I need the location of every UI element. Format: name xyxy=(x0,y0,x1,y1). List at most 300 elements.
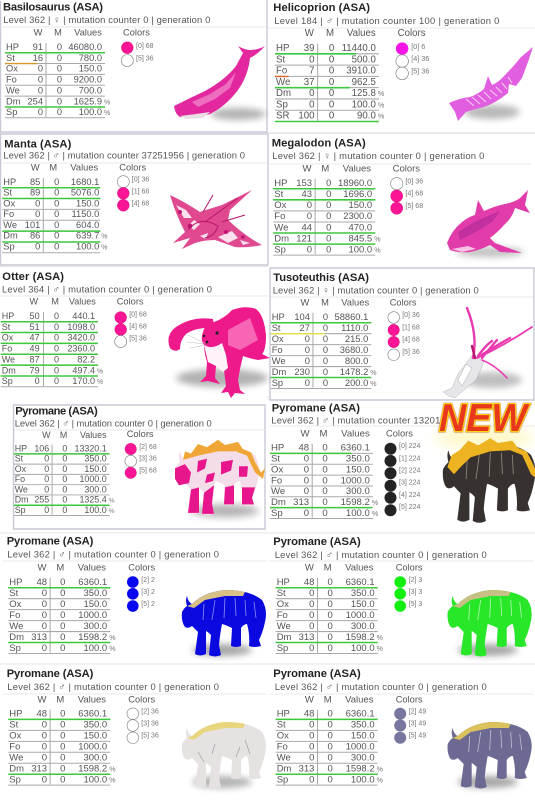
title: Pyromane blue: Pyromane (ASA) xyxy=(7,536,94,548)
stat table: Helicoprion: 100 xyxy=(298,111,314,122)
stat table: Pyromane purple: % xyxy=(377,776,384,784)
stat table: Otter: Values xyxy=(69,297,96,307)
stat table: Megalodon: Values xyxy=(343,163,371,174)
stat table: Pyromane purple: 0 xyxy=(309,774,314,785)
stat table: Pyromane blue: HP xyxy=(9,577,22,588)
color swatches: Tusoteuthis: [0] 36 xyxy=(402,312,420,319)
stat table: Pyromane green: Dm xyxy=(277,632,292,643)
stat table: Pyromane black: St xyxy=(271,454,280,465)
color swatches: Pyromane purple: [5] 49 xyxy=(409,733,426,740)
stat table: Pyromane purple: 100.0 xyxy=(351,774,375,785)
stat table: Pyromane white: 150.0 xyxy=(83,731,107,742)
stat table: Otter: 0 xyxy=(54,333,59,343)
stat table: Pyromane pink: Fo xyxy=(15,474,25,484)
stat table: Pyromane purple: Sp xyxy=(277,774,288,785)
stat table: Megalodon: 0 xyxy=(326,233,331,244)
stat table: Otter: Fo xyxy=(2,343,12,354)
stat table: Pyromane green: 0 xyxy=(309,610,314,621)
color swatches: Helicoprion: [4] 36 xyxy=(411,54,429,63)
stat table: Otter: 0 xyxy=(35,376,40,386)
stat table: Pyromane pink: 0 xyxy=(62,464,67,474)
stat table: Pyromane white: 0 xyxy=(42,731,47,742)
stat table: Basilosaurus: W xyxy=(34,28,43,38)
stat table: Helicoprion: Sp xyxy=(276,99,288,110)
color swatches: Pyromane pink: Colors xyxy=(127,429,154,439)
stat table: Helicoprion: 0 xyxy=(329,54,334,65)
stat table: Pyromane white: 0 xyxy=(60,731,65,742)
stat table: Basilosaurus: Ox xyxy=(6,64,18,74)
stat table: Pyromane black: Dm xyxy=(271,497,286,508)
stat table: Pyromane black: % xyxy=(372,499,379,507)
color swatches: Pyromane white: [2] 36 xyxy=(141,709,159,716)
color swatches: Pyromane white: [5] 36 xyxy=(141,733,159,740)
stat table: Pyromane black: 0 xyxy=(304,475,309,486)
stat table: Pyromane blue: 313 xyxy=(31,632,47,643)
stat table: Pyromane white: W xyxy=(37,694,47,705)
stat table: Tusoteuthis: W xyxy=(300,298,309,308)
color swatches: Tusoteuthis: Colors xyxy=(390,298,417,308)
stat table: Pyromane purple: 0 xyxy=(328,774,333,785)
stat table: Pyromane white: 350.0 xyxy=(83,720,107,731)
stat table: Megalodon: 0 xyxy=(326,244,331,255)
stat table: Otter: 0 xyxy=(54,376,59,386)
card: Pyromane pink xyxy=(14,406,265,517)
stat table: Pyromane purple: 0 xyxy=(328,753,333,764)
color swatches: Pyromane blue: Colors xyxy=(128,563,156,573)
stat table: Megalodon: Sp xyxy=(274,244,286,255)
stat table: Otter: Sp xyxy=(2,376,13,386)
stat table: Tusoteuthis: 104 xyxy=(294,312,310,322)
stat table: Pyromane pink: 0 xyxy=(62,454,67,464)
glow behind NEW xyxy=(435,428,535,448)
stat table: Helicoprion: St xyxy=(276,54,285,65)
stat table: Otter: 440.1 xyxy=(72,311,95,321)
stat table: Pyromane black: 0 xyxy=(304,454,309,465)
stat table: Basilosaurus: 0 xyxy=(38,64,43,74)
stat table: Tusoteuthis: 800.0 xyxy=(345,356,368,366)
stat table: Megalodon: 0 xyxy=(326,189,331,200)
stat table: Otter: % xyxy=(97,368,103,375)
color swatches: Pyromane black: [5] 224 xyxy=(399,504,421,511)
stat table: Otter: 170.0 xyxy=(72,376,95,386)
stat table: Pyromane purple: St xyxy=(277,720,286,731)
stat table: Pyromane black: 1000.0 xyxy=(341,475,370,486)
stat table: Helicoprion: 7 xyxy=(309,66,314,77)
stat table: Pyromane black: 100.0 xyxy=(346,508,370,519)
subtitle: Basilosaurus: Level 362 | ♀ | mutation counter 0 | generation 0 xyxy=(3,14,210,25)
stat table: Otter: 49 xyxy=(30,343,40,354)
stat table: Pyromane pink: Dm xyxy=(15,495,29,505)
stat table: Tusoteuthis: 0 xyxy=(305,345,310,355)
stat table: Manta: 86 xyxy=(30,231,40,241)
stat table: Tusoteuthis: Fo xyxy=(272,345,283,355)
color swatches: Otter: [4] 68 xyxy=(129,324,147,330)
creature: Tusoteuthis squid xyxy=(443,308,532,398)
color swatches: Manta: Colors xyxy=(119,163,147,173)
stat table: Pyromane purple: 1598.2 xyxy=(346,764,375,774)
badge: NEW: NEW xyxy=(439,397,530,440)
stat table: Basilosaurus: HP xyxy=(6,42,19,52)
stat table: Tusoteuthis: We xyxy=(272,356,286,366)
stat table: Megalodon: 1696.0 xyxy=(343,189,372,200)
color swatches: Otter: Colors xyxy=(117,297,144,307)
card: Pyromane purple xyxy=(273,668,532,788)
stat table: Manta xyxy=(2,163,108,253)
stat table: Pyromane black: HP xyxy=(271,443,284,454)
stat table: Manta: 604.0 xyxy=(76,220,99,230)
stat table: Otter: 2360.0 xyxy=(67,343,95,354)
stat table: Megalodon: 2300.0 xyxy=(343,211,372,222)
subtitle: Tusoteuthis: Level 362 | ♀ | mutation counter 0 | generation 0 xyxy=(273,284,479,295)
stat table: Pyromane purple: 0 xyxy=(328,731,333,742)
stat table: Basilosaurus: 16 xyxy=(33,53,43,63)
stat table: Helicoprion: 90.0 xyxy=(357,111,376,122)
color swatches: Megalodon: [0] 36 xyxy=(405,177,423,185)
stat table: Pyromane purple: 6360.1 xyxy=(346,709,375,720)
stat table: Pyromane white: Dm xyxy=(9,764,24,774)
stat table: Pyromane black: 6360.1 xyxy=(341,443,370,454)
color swatches: Helicoprion: Colors xyxy=(398,28,426,39)
stat table: Tusoteuthis: 0 xyxy=(305,334,310,344)
stat table: Pyromane white: % xyxy=(109,776,116,784)
stat table: Pyromane purple: Values xyxy=(345,694,374,705)
stat table: Pyromane white: 0 xyxy=(42,720,47,731)
stat table: Pyromane white xyxy=(8,694,116,785)
stat table: Pyromane black: 0 xyxy=(322,475,328,486)
stat table: Pyromane blue: 0 xyxy=(60,643,65,654)
stat table: Helicoprion: 0 xyxy=(309,99,314,110)
stat table: Pyromane purple: 0 xyxy=(309,731,314,742)
subtitle: Otter: Level 364 | ♂ | mutation counter 0 | generation 0 xyxy=(2,283,212,294)
stat table: Pyromane pink: 0 xyxy=(62,443,67,453)
stat table: Pyromane green: W xyxy=(305,563,314,574)
card: Pyromane green xyxy=(273,536,532,656)
stat table: Otter: 1098.0 xyxy=(67,322,95,332)
stat table: Helicoprion: W xyxy=(305,28,315,39)
stat table: Basilosaurus: % xyxy=(104,99,110,106)
stat table: Pyromane green: Values xyxy=(345,563,374,574)
stat table: Helicoprion: M xyxy=(326,28,334,39)
card: Pyromane black xyxy=(270,397,535,523)
stat table: Pyromane green: 0 xyxy=(309,588,314,599)
stat table: Manta: 150.0 xyxy=(76,198,99,208)
stat table: Otter: We xyxy=(2,354,15,364)
stat table: Pyromane black: % xyxy=(372,510,379,518)
stat table: Megalodon: 0 xyxy=(326,222,331,233)
stat table: Tusoteuthis: 230 xyxy=(294,367,310,377)
subtitle: Megalodon: Level 362 | ♀ | mutation counter 0 | generation 0 xyxy=(272,150,484,161)
color swatches: Pyromane black: [4] 224 xyxy=(399,492,421,499)
color swatches: Pyromane pink: [5] 68 xyxy=(139,467,157,474)
stat table: Manta: Values xyxy=(70,163,99,173)
stat table: Manta: 0 xyxy=(35,209,40,219)
color swatches: Pyromane blue xyxy=(127,563,156,612)
stat table: Megalodon: M xyxy=(321,163,329,174)
stat table: Pyromane pink: 0 xyxy=(44,484,49,494)
stat table: Otter: 0 xyxy=(54,354,59,364)
stat table: Megalodon: We xyxy=(274,222,288,233)
stat table: Pyromane blue: We xyxy=(9,621,23,632)
stat table: Tusoteuthis: % xyxy=(370,381,377,388)
stat table: Pyromane black: Values xyxy=(341,429,370,439)
title: Otter: Otter (ASA) xyxy=(2,271,64,283)
color swatches: Helicoprion xyxy=(396,28,429,80)
stat table: Basilosaurus: 0 xyxy=(57,75,62,85)
stat table: Pyromane blue: 0 xyxy=(42,621,47,632)
stat table: Otter: 497.4 xyxy=(72,365,95,375)
stat table: Pyromane black: 313 xyxy=(293,497,309,508)
stat table: Tusoteuthis: Ox xyxy=(272,334,284,344)
stat table: Megalodon: 0 xyxy=(326,200,331,211)
color swatches: Basilosaurus: Colors xyxy=(123,28,150,38)
stat table: Pyromane green: 300.0 xyxy=(351,621,375,632)
stat table: Megalodon: 845.5 xyxy=(349,233,372,244)
creature: Pyromane purple xyxy=(448,722,532,788)
stat table: Helicoprion: 0 xyxy=(309,88,314,99)
stat table: Manta: 0 xyxy=(54,241,59,251)
stat table: Manta: 0 xyxy=(54,231,59,241)
stat table: Pyromane green: Fo xyxy=(277,610,288,621)
stat table: Megalodon: 470.0 xyxy=(349,222,372,233)
stat table: Otter: Dm xyxy=(2,365,16,375)
color swatches: Pyromane purple: Colors xyxy=(396,694,423,704)
stat table: Manta: 100.0 xyxy=(76,241,99,251)
stat table: Otter: 0 xyxy=(54,311,59,321)
stat table: Helicoprion: Values xyxy=(347,28,376,39)
stat table: Helicoprion: 125.8 xyxy=(352,88,376,99)
stat table: Tusoteuthis: 0 xyxy=(323,323,328,333)
stat table: Pyromane pink: HP xyxy=(15,443,27,453)
stat table: Megalodon: Ox xyxy=(274,200,287,211)
stat table: Pyromane pink: 300.0 xyxy=(84,484,107,494)
stat table: Pyromane black: 0 xyxy=(322,454,328,465)
stat table: Manta: % xyxy=(101,234,108,241)
stat table: Manta: St xyxy=(3,188,13,198)
stat table: Manta: 0 xyxy=(35,241,40,251)
stat table: Tusoteuthis: Sp xyxy=(272,378,283,388)
stat table: Helicoprion: 3910.0 xyxy=(346,66,376,77)
stat table: Pyromane pink: 0 xyxy=(62,484,67,494)
stat table: Pyromane blue: 0 xyxy=(60,599,65,610)
stat table: Pyromane blue xyxy=(8,563,116,654)
creature: Pyromane black xyxy=(443,438,535,523)
stat table: Tusoteuthis: 215.0 xyxy=(345,334,368,344)
stat table: Pyromane purple: 350.0 xyxy=(351,720,375,731)
stat table: Manta: 1680.1 xyxy=(71,177,99,187)
stat table: Megalodon: 153 xyxy=(296,178,312,189)
creature: Manta ray xyxy=(170,190,262,249)
stat table: Pyromane white: 1598.2 xyxy=(78,764,107,774)
color swatches: Basilosaurus xyxy=(121,28,154,66)
title: Pyromane white: Pyromane (ASA) xyxy=(7,668,94,680)
stat table: Pyromane white: 0 xyxy=(60,742,65,753)
stat table: Basilosaurus: 0 xyxy=(38,75,43,85)
stat table: Manta: 101 xyxy=(25,220,40,230)
stat table: Manta: 0 xyxy=(54,209,59,219)
stat table: Tusoteuthis: 0 xyxy=(323,345,328,355)
stat table: Pyromane blue: 1000.0 xyxy=(78,610,107,621)
color swatches: Tusoteuthis xyxy=(388,298,420,360)
color swatches: Pyromane black: [3] 224 xyxy=(399,480,421,487)
stat table: Otter: 82.2 xyxy=(77,354,95,364)
stat table: Pyromane blue: M xyxy=(56,563,64,574)
stat table: Helicoprion: Fo xyxy=(276,66,287,77)
stat table: Basilosaurus: 0 xyxy=(57,85,62,95)
stat table: Manta: M xyxy=(49,163,57,173)
stat table: Helicoprion: 500.0 xyxy=(352,54,376,65)
stat table: Pyromane green: We xyxy=(277,621,291,632)
stat table: Manta: 0 xyxy=(54,188,59,198)
stat table: Pyromane pink: 1325.4 xyxy=(79,495,107,505)
stat table: Pyromane pink: M xyxy=(60,430,67,440)
stat table: Pyromane blue: Fo xyxy=(9,610,20,621)
stat table: Pyromane blue: 0 xyxy=(42,643,47,654)
stat table: Pyromane black: 0 xyxy=(304,508,309,519)
stat table: Helicoprion: % xyxy=(378,89,385,98)
stat table: Pyromane blue: 48 xyxy=(36,577,47,588)
stat table: Pyromane pink: 0 xyxy=(44,474,49,484)
stat table: Pyromane black: W xyxy=(300,429,310,439)
stat table: Helicoprion: 0 xyxy=(329,111,334,122)
color swatches: Basilosaurus: [0] 68 xyxy=(136,43,154,50)
stat table: Pyromane white: 300.0 xyxy=(83,753,107,764)
stat table: Megalodon: 100.0 xyxy=(349,244,372,255)
subtitle: Pyromane blue: Level 362 | ♂ | mutation counter 0 | generation 0 xyxy=(7,549,219,560)
stat table: Pyromane purple: 0 xyxy=(328,742,333,753)
color swatches: Megalodon: [4] 68 xyxy=(405,190,423,198)
stat table: Pyromane blue: Values xyxy=(78,563,106,574)
stat table: Pyromane blue: 0 xyxy=(60,632,65,643)
title: Tusoteuthis: Tusoteuthis (ASA) xyxy=(273,272,369,284)
stat table: Basilosaurus: 780.0 xyxy=(79,53,102,63)
stat table: Basilosaurus: 254 xyxy=(27,96,43,106)
stat table: Pyromane pink: 100.0 xyxy=(84,505,107,515)
stat table: Otter: St xyxy=(2,322,11,332)
stat table: Megalodon: 43 xyxy=(301,189,312,200)
stat table: Pyromane purple: W xyxy=(305,694,314,705)
stat table: Pyromane white: 0 xyxy=(42,742,47,753)
stat table: Tusoteuthis: 200.0 xyxy=(345,378,368,388)
stat table: Pyromane black: We xyxy=(271,486,285,497)
stat table: Pyromane purple: M xyxy=(324,694,332,705)
stat table: Basilosaurus: 700.0 xyxy=(79,85,102,95)
stat table: Helicoprion: % xyxy=(378,100,385,109)
stat table: Pyromane green: 0 xyxy=(328,610,333,621)
color swatches: Manta: [4] 68 xyxy=(132,200,149,208)
stat table: Megalodon: HP xyxy=(274,178,287,189)
stat table: Pyromane black: 350.0 xyxy=(346,454,370,465)
stat table: Pyromane black xyxy=(270,429,379,519)
stat table: Pyromane white: 313 xyxy=(31,764,47,774)
stat table: Pyromane pink: W xyxy=(42,430,51,440)
stat table: Pyromane black: 48 xyxy=(298,443,309,454)
stat table: Otter: 0 xyxy=(54,343,59,354)
stat table: Pyromane blue: 6360.1 xyxy=(78,577,107,588)
stat table: Pyromane purple: Dm xyxy=(277,764,292,774)
stat table: Pyromane black: 0 xyxy=(322,497,328,508)
subtitle: Manta: Level 362 | ♂ | mutation counter 37251956 | generation 0 xyxy=(3,150,245,161)
stat table: Otter: Ox xyxy=(2,333,14,343)
stat table: Tusoteuthis: 1478.2 xyxy=(340,367,368,377)
stat table: Manta: W xyxy=(31,163,40,173)
stat table: Otter: 47 xyxy=(30,333,40,343)
creature: Megalodon shark xyxy=(447,190,530,257)
stat table: Pyromane green: 0 xyxy=(309,599,314,610)
stat table: Tusoteuthis: 0 xyxy=(323,367,328,377)
color swatches: Pyromane purple: [2] 49 xyxy=(409,709,426,716)
stat table: Otter: W xyxy=(30,297,38,307)
stat table: Helicoprion xyxy=(275,28,385,122)
stat table: Pyromane black: 0 xyxy=(304,486,309,497)
stat table: Pyromane purple: 0 xyxy=(328,720,333,731)
stat table: Basilosaurus: St xyxy=(6,53,15,63)
stat table: Pyromane blue: 0 xyxy=(60,577,65,588)
stat table: Pyromane white: 0 xyxy=(42,774,47,785)
stat table: Pyromane green: 0 xyxy=(328,588,333,599)
stat table: Megalodon: 121 xyxy=(296,233,312,244)
stat table: Pyromane pink: Values xyxy=(80,430,107,440)
stat table: Otter: 0 xyxy=(54,322,59,332)
stat table: Basilosaurus: 9200.0 xyxy=(74,75,102,85)
card: Megalodon xyxy=(272,138,530,257)
stat table: Pyromane purple: HP xyxy=(277,709,290,720)
stat table: Basilosaurus: 0 xyxy=(57,42,62,52)
stat table: Pyromane pink: 1000.0 xyxy=(79,474,107,484)
stat table: Pyromane blue: 150.0 xyxy=(83,599,107,610)
color swatches: Pyromane pink: [2] 68 xyxy=(139,444,157,451)
color swatches: Pyromane black: [2] 224 xyxy=(399,468,421,475)
stat table: Basilosaurus: 0 xyxy=(57,64,62,74)
stat table: Basilosaurus: Values xyxy=(74,28,102,38)
stat table: Manta: 0 xyxy=(35,198,40,208)
stat table: Pyromane purple: 313 xyxy=(299,764,314,774)
stat table: Helicoprion: HP xyxy=(276,43,289,54)
stat table: Megalodon xyxy=(273,163,381,255)
card: Pyromane white xyxy=(7,668,266,788)
stat table: Pyromane white: St xyxy=(9,720,19,731)
stat table: Pyromane black: 300.0 xyxy=(346,486,370,497)
stat table: Megalodon: % xyxy=(374,246,381,254)
stat table: Pyromane purple: 0 xyxy=(328,764,333,774)
stat table: Helicoprion: 0 xyxy=(329,66,334,77)
stat table: Pyromane black: 150.0 xyxy=(346,465,370,475)
stat table: Pyromane purple xyxy=(276,694,384,785)
stat table: Manta: 639.7 xyxy=(76,231,99,241)
stat table: Otter: HP xyxy=(2,311,14,321)
color swatches: Pyromane green: [5] 3 xyxy=(409,601,422,608)
stat table: Pyromane blue: 0 xyxy=(42,599,47,610)
stat table: Pyromane pink: 13320.1 xyxy=(75,443,107,453)
stat table: Manta: We xyxy=(3,220,17,230)
stat table: Otter: 79 xyxy=(30,365,40,375)
stat table: Otter xyxy=(1,297,103,387)
creature: Pyromane white xyxy=(182,722,266,788)
stat table: Pyromane white: 0 xyxy=(42,753,47,764)
stat table: Megalodon: 0 xyxy=(307,200,312,211)
stat table: Pyromane black: 0 xyxy=(304,465,309,475)
stat table: Megalodon: 0 xyxy=(326,178,331,189)
color swatches: Manta xyxy=(117,163,149,211)
stat table: Otter: % xyxy=(97,379,103,386)
title: Pyromane black: Pyromane (ASA) xyxy=(272,402,360,414)
card: Manta xyxy=(2,138,262,253)
stat table: Megalodon: % xyxy=(374,235,381,243)
stat table: Pyromane pink: We xyxy=(15,484,28,494)
stat table: Pyromane blue: 0 xyxy=(42,588,47,599)
stat table: Helicoprion: 39 xyxy=(304,43,314,54)
creature: Basilosaurus whale xyxy=(174,46,266,120)
subtitle: Pyromane black: Level 362 | ♂ | mutation counter 13201 xyxy=(271,415,440,426)
